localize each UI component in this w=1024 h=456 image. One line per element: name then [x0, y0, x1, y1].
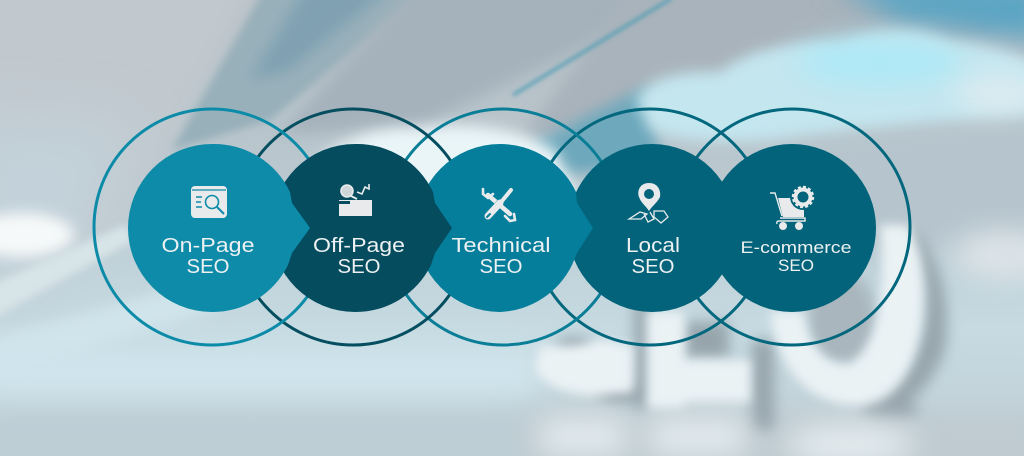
label: E-commerce SEO: SEO [778, 256, 814, 275]
panel: E-commerce SEO [708, 144, 876, 312]
label: Off-Page SEO: SEO [338, 255, 380, 278]
label: E-commerce SEO [740, 238, 852, 275]
ring 5 [674, 109, 910, 345]
ring 3 [385, 109, 621, 345]
label: Off-Page SEO: Off-Page [313, 234, 405, 257]
label: Local SEO: Local [626, 234, 680, 257]
label: Technical SEO: Technical [452, 234, 550, 257]
panel: Local SEO [568, 144, 736, 312]
panel: Off-Page SEO [271, 144, 452, 312]
background: blurred SEO 3D letters [535, 225, 947, 456]
ring 2 [235, 109, 471, 345]
label: E-commerce SEO: E-commerce [740, 238, 852, 257]
outer rings [94, 109, 910, 345]
icon: shopping cart with gear [770, 184, 816, 230]
label: Local SEO: SEO [632, 255, 674, 278]
label: On-Page SEO [162, 234, 254, 278]
label: On-Page SEO: On-Page [162, 234, 254, 257]
icon: map pin over folded map [629, 183, 668, 223]
icon: page with magnifier [191, 186, 227, 218]
label: Off-Page SEO [313, 234, 405, 278]
icon: magnifier, trend line and browser bar [339, 184, 372, 216]
ring 4 [532, 109, 768, 345]
label: Local SEO [626, 234, 680, 278]
label: Technical SEO: SEO [480, 255, 522, 278]
label: Technical SEO [452, 234, 550, 278]
icon: crossed wrench and screwdriver [483, 189, 515, 221]
panel: Technical SEO [416, 144, 593, 312]
ring 1 [94, 109, 330, 345]
label: On-Page SEO: SEO [186, 255, 230, 278]
panel: On-Page SEO [128, 144, 310, 312]
